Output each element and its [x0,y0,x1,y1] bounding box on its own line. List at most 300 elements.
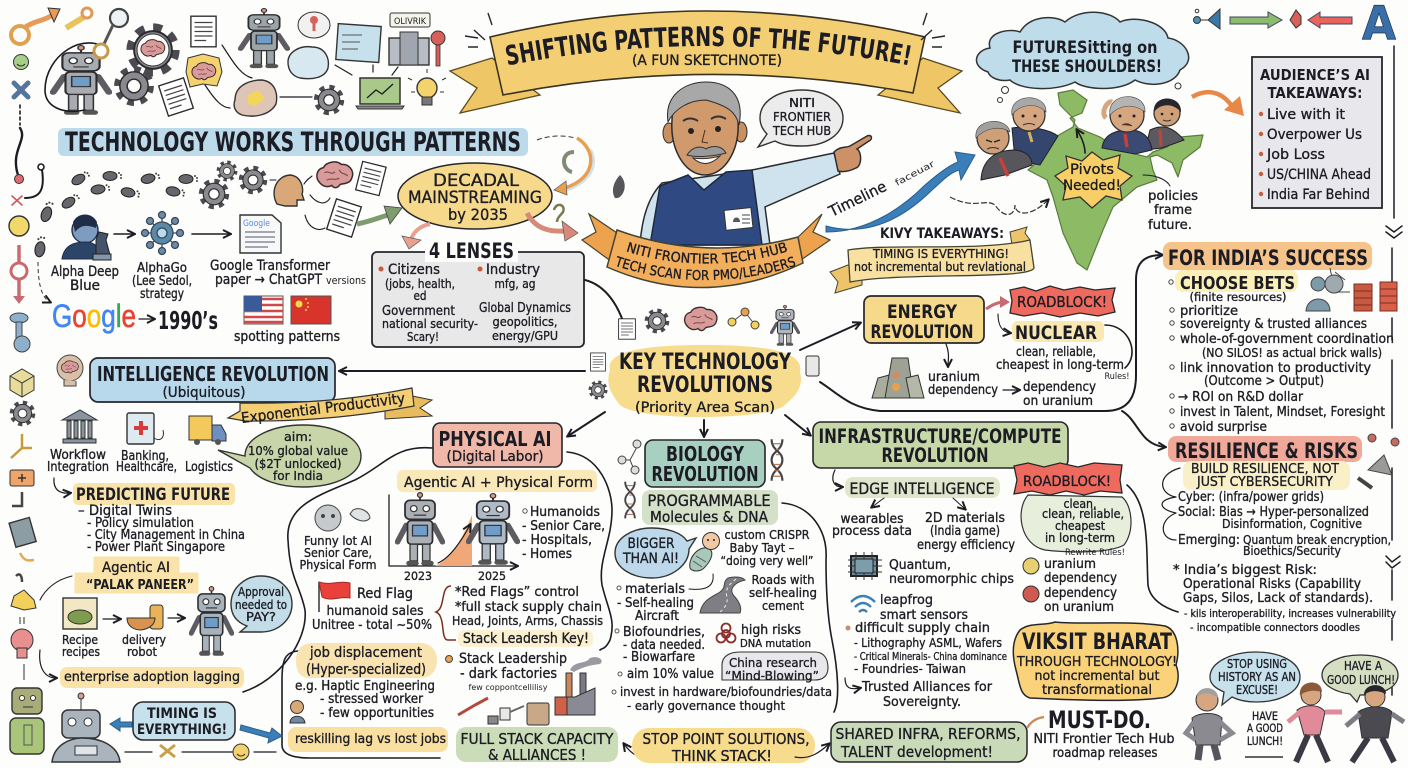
ribbon tails [582,214,830,262]
arrow: to must-do [1027,717,1044,728]
list: humanoids [522,505,605,562]
text: must-do [1034,706,1174,761]
uranium labels [928,370,1096,409]
arrow: to edge [833,470,842,487]
icon: office building [389,13,430,65]
bubble: clean reliable [1021,495,1131,558]
icon: funny robot head [315,505,370,531]
roadblock badge: ROADBLOCK! [1017,293,1107,311]
icon: dna right [772,439,782,481]
icons: connectors and tool [1358,434,1399,488]
icon: stressed worker [290,700,305,723]
label: wearables and 2d materials [832,511,1015,553]
timing is everything [110,702,282,760]
labels: recipe and delivery: delivery [122,633,166,647]
list: supply chain: - Foundries- Taiwan [854,662,966,676]
face features [683,116,726,164]
list: risk types: Emerging: [1178,533,1240,548]
label: red flag: Unitree - total ~50% [312,618,432,633]
list: digital twins [78,503,245,555]
burst: pivots needed [1055,152,1132,208]
divider marks [20,617,24,680]
blob: viksit bharat: THROUGH TECHNOLOGY! [1016,654,1177,670]
label: crispr: Baby Tayt – [730,540,794,555]
roadblock badge [1014,463,1122,495]
bubble: clean reliable: clean, reliable, [1042,507,1124,521]
heading: REVOLUTION [882,444,988,467]
bubble: aim: ($2T unlocked) [254,456,342,471]
label: roads: Roads with [752,572,814,587]
list: aim and invest: invest in hardware/biofoundries/data [620,684,832,699]
heading: energy: REVOLUTION [870,321,974,343]
arrow: to enterprise [40,650,56,678]
box: shared infra: SHARED INFRA, REFORMS, [836,725,1020,743]
nuclear label: NUCLEAR [1015,322,1097,344]
ribbon [848,240,1034,282]
figure: man running [1346,685,1404,762]
list: success items: (Outcome > Output) [1204,374,1324,389]
choose bets [1169,270,1298,304]
arrow: orange to audience [1192,92,1244,116]
emphasis ticks [465,13,945,47]
heading: 4 lenses: 4 LENSES [429,239,514,263]
blob: viksit bharat: not incremental but [1034,668,1160,684]
arrow: green [1230,12,1282,28]
list: digital twins: - City Management in China [87,528,245,543]
icon: china flag [291,296,331,324]
bubble: niti frontier tech hub: FRONTIER [773,109,831,124]
icon: blue chat sheet [336,24,381,62]
heading: audience [1260,66,1370,102]
portrait: pointing leader [640,82,871,245]
icon: green robot [10,688,44,754]
lens: citizens: Citizens [388,262,440,278]
labels: workflow sectors: Integration [47,460,109,475]
line to sidebar [40,576,72,600]
bubble: have a good lunch [1322,655,1398,702]
arrows between doodles [205,45,398,108]
list: success items: avoid surprise [1180,420,1267,435]
lens: global dynamics: energy/GPU [492,329,558,343]
text: job displacement [295,645,435,721]
label: alpha deep blue [51,264,119,294]
icon: pencil note [356,161,386,196]
arrow: to roadblock [986,296,1010,309]
highlight: programmable: Molecules & DNA [650,508,769,526]
list: success items [1170,304,1394,435]
ribbon text [854,246,1026,274]
list: supply chain [846,620,1007,676]
hub title: REVOLUTIONS [637,373,773,398]
label: crispr: “doing very well” [720,553,814,568]
icon: yellow coin [9,216,29,236]
text: job displacement: - few opportunities [320,706,434,721]
figure: older man [1186,688,1232,760]
label: red flag: Red Flag [357,586,413,602]
icon: first aid case [10,470,34,486]
label: quantum: Quantum, [889,557,951,573]
highlight: stop point solutions [632,728,815,765]
burst: pivots needed: Needed! [1063,178,1121,194]
icon: truck [189,416,226,445]
label: funny lot ai: Physical Form [300,557,376,572]
arrow [168,617,184,619]
text: must-do: roadmap releases [1052,746,1158,761]
labels: workflow sectors: Banking, [121,449,169,464]
icons: top right row [1194,0,1396,50]
title banner [448,10,964,114]
label: crispr [720,527,814,568]
bubble: clean reliable: cheapest [1055,519,1105,533]
lens: global dynamics: Global Dynamics [479,301,571,316]
sign text: OLIVRIK [394,17,426,27]
nuclear detail: Rules! [1104,372,1130,382]
icon: cheese [11,590,36,610]
list: risk types [1178,490,1391,558]
label: alphago [132,261,192,302]
arrow: timeline [825,152,975,232]
list: biofoundries: - data needed. [623,638,705,653]
icon: small red tag [1290,10,1301,28]
dashed loop arrow [950,197,1048,214]
enterprise adoption highlight: enterprise adoption lagging [64,669,240,685]
list: supply chain: - Critical Minerals- China dominance [854,650,1007,663]
logo: google 1990s: Google [52,298,136,334]
text: biggest risk: Gaps, Silos, Lack of standards). [1183,590,1373,606]
highlight: build resilience: JUST CYBERSECURITY [1196,474,1334,490]
banner tails [450,58,962,113]
lens: government: Scary! [407,330,439,344]
icon: squiggle path [16,105,22,175]
icon: stacked papers [327,199,361,237]
bubble: aim: aim: [284,429,312,444]
bubble: bigger than ai: THAN AI! [622,551,679,567]
highlight: reskilling [288,727,448,752]
label: leapfrog: leapfrog [880,592,933,608]
list: success items: sovereignty & trusted alliances [1180,317,1367,332]
label: small timeline note: faceuar [894,159,937,189]
label: red flag: humanoid sales [326,603,424,619]
icon: arrow [12,492,22,506]
list: digital twins: – Digital Twins [78,503,172,519]
ribbon text: TIMING IS EVERYTHING! [872,246,1009,261]
text: biggest risk: * India’s biggest Risk: [1173,562,1317,578]
list: stack leadership: Stack Leadership [459,651,567,667]
panel: audience takeaways [1252,57,1382,208]
lens: citizens: (jobs, health, [385,276,455,291]
label: policies frame future: policies [1148,188,1198,204]
icon: biohazard [716,624,736,642]
list: supply chain: difficult supply chain [855,620,990,636]
icon: gear [12,403,33,424]
highlight: programmable: PROGRAMMABLE [648,491,770,510]
label: google transformer: versions [326,275,366,287]
lens: industry: Industry [486,262,540,278]
label: alphago: strategy [140,287,184,302]
callout: decadal mainstreaming: MAINSTREAMING [408,188,542,208]
hub title: (Priority Area Scan) [635,400,775,416]
ribbon folds [830,227,1030,293]
lens: global dynamics [479,301,571,343]
arrow: left [624,744,655,758]
uranium labels: on uranium [1023,394,1093,409]
list: success items: link innovation to productivity [1180,361,1371,376]
chart: growth with robots [389,493,517,583]
label: leapfrog: smart sensors [880,607,968,623]
list: digital twins: - Power Plant Singapore [87,540,225,555]
uranium labels: dependency [928,383,998,398]
label: google transformer [210,258,366,288]
label: roads: self-healing [749,585,817,600]
list: materials: - Self-healing [617,596,694,611]
icon: robot with wrench [241,8,287,68]
icon: brick walls [1354,282,1397,311]
icon: head with brain [57,355,83,386]
cloud: futuresitting on these shoulders: THESE SHOULDERS! [1012,57,1162,76]
list: success items: invest in Talent, Mindset, Foresight [1180,405,1385,420]
blob: viksit bharat: transformational [1042,682,1152,698]
section: kivy takeaways [830,226,1034,293]
bubble: stop using history: HISTORY AS AN [1218,670,1296,684]
icon: orange arrow with ring [11,8,60,44]
highlight: stack leadership key: Stack Leadersh Key! [463,631,589,647]
predicting future heading: PREDICTING FUTURE [76,485,230,505]
label: wearables and 2d materials: energy efficiency [917,538,1015,553]
list: risk types: Cyber: (infra/power grids) [1178,490,1324,505]
icon: smile [14,54,28,70]
icon: yellow arrow [11,434,32,458]
leader 3 [1102,97,1152,154]
icon: chip [848,552,882,580]
nuclear detail [996,345,1130,382]
bubble: niti frontier tech hub: NITI [789,95,815,110]
icon: light bulb [408,69,446,105]
logo: google 1990s [52,298,218,335]
panel: for india's success [1163,242,1397,435]
label: wearables and 2d materials: 2D materials [925,511,1005,526]
heading: audience: AUDIENCE’S AI [1260,66,1370,84]
icon: gear [317,88,341,112]
icon: brain [317,162,353,188]
icon: red head [11,629,33,658]
list: stack leadership: few coppontcellilisy [468,683,548,692]
highlight: stop point solutions: STOP POINT SOLUTIONS, [642,730,810,748]
uranium labels: uranium [928,370,980,385]
map: india [1028,90,1203,270]
bubble: niti frontier tech hub: TECH HUB [772,123,831,138]
cloud: futuresitting on these shoulders: FUTURESitting on [1012,38,1158,57]
labels: workflow sectors: Workflow [50,448,106,463]
list: humanoids: - Homes [522,547,572,562]
icon: robot with wrench [53,46,109,115]
arrow: down [946,344,948,366]
icon: person with network [1306,268,1350,311]
list: success items: whole-of-government coordination [1180,332,1394,347]
icon: grey robot bust [52,693,120,762]
icon: tablet [9,517,36,547]
section: top doodles [45,8,446,116]
ribbon: exponential productivity: Exponential Productivity [240,391,406,427]
lens: government: Government [382,303,455,319]
lens: government [382,303,478,344]
leader 1 [976,121,1032,180]
uranium labels: dependency [1023,380,1096,395]
vest [650,170,762,245]
nuclear detail: cheapest in long-term [996,358,1124,373]
highlight: full stack [456,727,618,764]
heading box: (Ubiquitous) [162,385,246,401]
lens: government: national security- [382,317,478,331]
icon: dice [10,369,34,397]
icon: baby [690,532,720,571]
list: success items: prioritize [1180,304,1238,319]
bubble: china research [722,652,828,683]
bubble: china research: China research [729,655,817,670]
label: high risks: DNA mutation [740,638,811,650]
label: wearables and 2d materials: process data [832,524,912,539]
agentic ai heading [76,558,197,593]
ribbon text: not incremental but revlational [854,260,1026,274]
ribbon text: NITI FRONTIER TECH HUB [626,242,787,264]
highlight: full stack: & ALLIANCES ! [488,746,586,764]
bubble: approval: PAY? [246,610,276,624]
label: have a good lunch: A GOOD [1247,721,1283,735]
heading: energy [870,301,974,343]
choose bets: CHOOSE BETS [1180,273,1295,294]
list: aim and invest: - early governance thought [627,698,785,713]
bubble: stop using history: STOP USING [1227,657,1287,671]
list: stack leadership [446,651,567,692]
list: takeaways: Live with it [1267,107,1345,123]
label: alpha deep blue: Alpha Deep [51,264,119,280]
label: funny lot ai: Funny lot AI [304,533,372,548]
label: alphago: (Lee Sedol, [132,274,192,289]
icon: paper stack [159,78,193,116]
text: job displacement: e.g. Haptic Engineering [295,679,435,694]
timing text: EVERYTHING! [137,722,227,738]
shirt and raised arm [640,153,840,245]
chart: growth with robots: 2025 [478,569,506,583]
bubble: clean reliable: clean, [1064,497,1096,511]
label: google transformer: paper → ChatGPT [215,272,322,288]
roadblock badge: ROADBLOCK! [1023,474,1111,490]
icon: clipboard [127,413,163,444]
lens: global dynamics: geopolitics, [492,315,558,329]
label: high risks: high risks [741,623,801,638]
panel: intelligence revolution [40,355,432,688]
bubble: approval [231,576,292,632]
arrow: green to decadal [357,206,402,224]
chart: growth with robots: 2023 [404,569,432,583]
arrow [103,618,120,620]
icon: google paper [240,215,281,253]
icon group: gears to brain doodle [202,161,402,237]
label: wearables and 2d materials: wearables [840,512,904,527]
icon: key [66,8,92,28]
arrow: inside map [1077,130,1085,153]
bubble: have a good lunch: HAVE A [1344,659,1383,673]
labels: recipe and delivery: Recipe [62,633,98,647]
highlight: agentic + physical [397,470,597,492]
arrow: right [240,725,282,743]
labels: recipe and delivery: recipes [62,645,100,659]
list: risk types: Disinformation, Cognitive [1222,516,1362,531]
heading [645,440,765,487]
arrow: right [795,744,829,758]
highlight: edge intelligence: EDGE INTELLIGENCE [850,479,994,498]
list: takeaways: Job Loss [1266,147,1325,163]
callout: decadal mainstreaming: by 2035 [448,205,508,224]
bubble: aim: 10% global value [248,443,348,458]
arrow [192,233,230,235]
icon: red dot [14,174,24,184]
connector lines to right column [585,255,1165,447]
head [672,88,738,175]
hub title: KEY TECHNOLOGY [619,350,792,375]
list: biofoundries: Biofoundries, [623,625,705,640]
roadblock badge [1010,286,1115,317]
icon: magnifier [94,9,128,58]
label: crispr: custom CRISPR [724,527,810,542]
title text: SHIFTING PATTERNS OF THE FUTURE! [506,26,911,65]
label: google transformer: Google Transformer [210,258,330,274]
panel: 4 lenses [372,239,584,347]
list: takeaways [1259,107,1371,203]
orange ribbon [581,212,832,288]
label: roads: cement [762,598,804,613]
list: red flags control: Head, Joints, Arms, Chassis [452,614,603,628]
icon: pin [1194,9,1220,29]
icon: orbit arc around robot [45,43,108,111]
list: uranium dependency: dependency [1044,571,1117,586]
blob: viksit bharat [1013,622,1178,700]
bubble: china research: “Mind-Blowing” [725,668,819,683]
icon: red pin [431,31,445,66]
list: red flags control: *full stack supply chain [455,599,602,615]
highlight: full stack: FULL STACK CAPACITY [460,730,614,748]
heading box: INTELLIGENCE REVOLUTION [97,362,329,386]
text: biggest risk: Operational Risks (Capability [1183,576,1361,592]
hair [668,82,740,125]
labels: workflow sectors [47,448,233,475]
icon: bowl and bottle [127,605,163,630]
list: humanoids: Humanoids [530,505,600,520]
nuclear detail: clean, reliable, [1016,345,1096,360]
heading: technology works through patterns: TECHNOLOGY WORKS THROUGH PATTERNS [65,127,521,158]
lens: industry [478,262,540,291]
curve path for title [505,46,912,66]
highlight: build resilience [1183,461,1350,490]
hand [834,136,871,172]
id card [724,208,753,230]
box: shared infra [831,722,1027,762]
icon: thought cloud [288,47,328,79]
text: job displacement: (Hyper-specialized) [306,662,426,678]
subtitle: (A FUN SKETCHNOTE) [632,53,782,69]
list: biofoundries: - Biowarfare [623,650,695,665]
text: must-do: MUST-DO. [1048,706,1151,734]
leader 4 [1145,98,1184,150]
heading: PHYSICAL AI [438,427,552,451]
arrow [114,233,134,235]
hub title [619,350,792,416]
text: job displacement: - stressed worker [320,692,424,707]
list: materials: materials [625,582,685,597]
icon: recipe [63,598,97,629]
figures: four worried leaders [976,97,1184,180]
icon: wifi [851,596,875,612]
icon: factory [555,657,602,715]
